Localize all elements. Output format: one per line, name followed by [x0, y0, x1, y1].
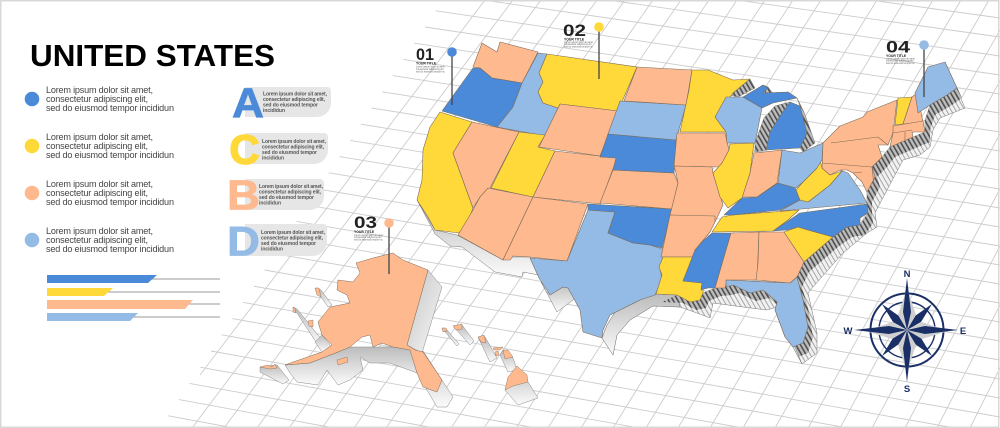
pin 03: YOUR TITLE [354, 230, 375, 234]
panel: B: B [227, 172, 260, 219]
pin 02: sed do eiusmod tempor inc [564, 45, 594, 48]
state: Mississippi [683, 233, 731, 290]
state: Idaho [497, 53, 558, 136]
legend item: salmon: Lorem ipsum dolor sit amet, [46, 179, 153, 189]
states: New York, Pennsylvania, mid-Atlantic [822, 100, 897, 192]
panel: A: incididun [263, 108, 285, 114]
state: South Dakota [608, 101, 686, 140]
pin 02: Lorem ipsum dolor sit amet [564, 41, 593, 44]
state: Washington [473, 42, 538, 83]
pin 04: sed do eiusmod tempor inc [886, 62, 916, 65]
pin 03: sed do eiusmod tempor inc [354, 238, 384, 241]
panel: C: incididun [262, 156, 284, 162]
state: Missouri [670, 166, 723, 222]
panel: B: sed do eiusmod tempor [259, 195, 314, 201]
panel: A: sed do eiusmod tempor [263, 103, 318, 109]
map: Alaska [285, 253, 442, 392]
pin 03: Lorem ipsum dolor sit amet [354, 234, 383, 237]
title: UNITED STATES [30, 38, 275, 73]
pin 04: YOUR TITLE [886, 54, 907, 58]
map extrusion: contiguous US [417, 62, 965, 364]
state: Michigan upper [743, 85, 797, 108]
state: Michigan lower [766, 102, 807, 150]
panel: D: consectetur adipiscing elit, [261, 236, 324, 242]
state: Oregon [442, 68, 522, 127]
pin 02 [563, 22, 604, 79]
panel: C: consectetur adipiscing elit, [262, 144, 325, 150]
pin 01: consectetur adipiscing elit [416, 68, 444, 71]
legend item: blue: consectetur adipiscing elit, [46, 94, 148, 104]
state: North Dakota [624, 67, 692, 105]
state: Louisiana [656, 257, 703, 302]
panel: D: incididun [261, 246, 283, 252]
compass rose: E [960, 326, 966, 337]
legend item: light blue [25, 226, 174, 254]
state: Georgia [756, 232, 804, 283]
state: Ohio [778, 143, 823, 188]
panel: D: sed do eiusmod tempor [261, 241, 316, 247]
legend item: blue: sed do eiusmod tempor incididun [46, 103, 174, 113]
state: Kentucky [724, 183, 800, 215]
state: West Virginia [796, 160, 842, 202]
panel: A: A [232, 80, 264, 126]
legend item: salmon [25, 179, 174, 207]
panel: B: consectetur adipiscing elit, [259, 190, 322, 196]
state: Colorado [533, 151, 617, 204]
state: California [417, 112, 473, 233]
state: Iowa [674, 133, 729, 167]
state: Florida [726, 277, 808, 347]
legend item: yellow [25, 132, 174, 160]
legend item: salmon: consectetur adipiscing elit, [46, 188, 148, 198]
map extrusion: Alaska and Hawaii [260, 270, 538, 407]
compass rose: N [904, 269, 911, 280]
bar chart [47, 275, 220, 321]
state: South Carolina [784, 227, 833, 262]
state: North Carolina [773, 204, 868, 237]
state: New Mexico [503, 197, 588, 261]
pin 03: consectetur adipiscing elit [354, 236, 382, 239]
panel: D [227, 218, 327, 265]
panel: D: Lorem ipsum dolor sit amet, [261, 230, 326, 236]
pin 03 [354, 214, 394, 274]
state: Indiana [742, 150, 782, 197]
compass rose [844, 269, 966, 395]
map: contiguous states [417, 42, 957, 347]
pin 01: YOUR TITLE [416, 62, 437, 66]
panel: A: consectetur adipiscing elit, [263, 97, 326, 103]
pin 04: Lorem ipsum dolor sit amet [886, 58, 915, 60]
panel: C: sed do eiusmod tempor [262, 150, 317, 156]
states: southern New England [890, 121, 925, 147]
legend [25, 85, 174, 254]
state: Illinois [713, 143, 754, 208]
state: Montana [538, 54, 637, 111]
pin 02: 02 [563, 22, 586, 40]
panel: B: incididun [259, 200, 281, 206]
state: Wisconsin [715, 97, 762, 143]
pin 02: consectetur adipiscing elit [564, 43, 592, 46]
legend item: light blue: consectetur adipiscing elit, [46, 235, 148, 245]
legend item: salmon: sed do eiusmod tempor incididun [46, 197, 174, 207]
state: Nebraska [600, 134, 676, 173]
panel: A: Lorem ipsum dolor sit amet, [263, 92, 328, 98]
pin 01 [416, 46, 457, 105]
state: Wyoming [539, 104, 618, 156]
panel: B [227, 172, 324, 219]
state: Oklahoma [588, 204, 672, 248]
panel: C [230, 126, 328, 172]
pin 01: 01 [416, 46, 434, 64]
compass rose: W [844, 326, 853, 337]
legend item: yellow: sed do eiusmod tempor incididun [46, 150, 174, 160]
state: Nevada [453, 122, 519, 208]
state: Alabama [715, 232, 759, 288]
state: Virginia [780, 170, 867, 211]
state: Texas [530, 210, 665, 338]
state: Maine [915, 62, 957, 113]
state: Kansas [600, 170, 678, 209]
panel: D: D [227, 218, 260, 265]
legend item: light blue: Lorem ipsum dolor sit amet, [46, 226, 153, 236]
legend item: light blue: sed do eiusmod tempor incididun [46, 244, 174, 254]
state: Tennessee [712, 210, 799, 232]
pin 01: sed do eiusmod tempor inc [416, 70, 446, 74]
legend item: blue [25, 85, 174, 113]
pin 01: Lorem ipsum dolor sit amet [416, 66, 445, 68]
pin 04: consectetur adipiscing elit [886, 60, 914, 63]
pin 03: 03 [354, 214, 377, 232]
pin 02: YOUR TITLE [564, 38, 585, 42]
pin 04 [886, 38, 929, 97]
state: Arkansas [661, 215, 715, 257]
map: Alaska islands and Hawaii [260, 288, 528, 390]
state: Arizona [458, 188, 533, 260]
panel: B: Lorem ipsum dolor sit amet, [259, 184, 324, 190]
panel: C: C [230, 126, 260, 172]
panel: C: Lorem ipsum dolor sit amet, [262, 139, 327, 145]
compass rose: S [904, 384, 910, 395]
legend item: yellow: consectetur adipiscing elit, [46, 141, 148, 151]
state: Utah [491, 132, 555, 197]
legend item: yellow: Lorem ipsum dolor sit amet, [46, 132, 153, 142]
state: New Hampshire [903, 93, 923, 124]
pin 04: 04 [886, 38, 911, 56]
legend item: blue: Lorem ipsum dolor sit amet, [46, 85, 153, 95]
state: Vermont [895, 97, 912, 125]
panel: A [232, 80, 331, 126]
state: Minnesota [680, 70, 750, 132]
